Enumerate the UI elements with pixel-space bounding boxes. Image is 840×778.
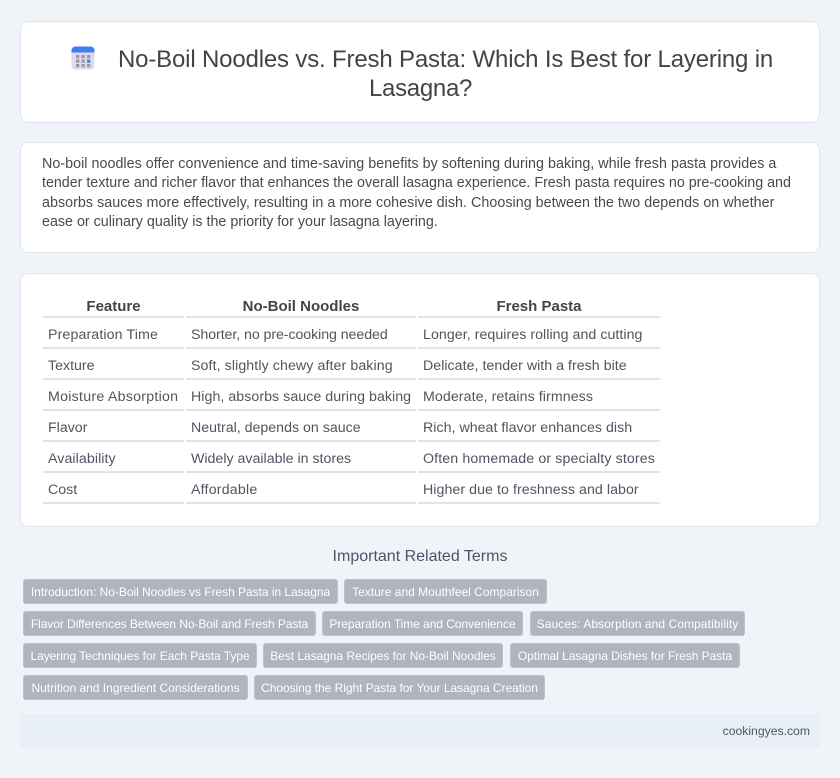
tags: related terms: Nutrition and Ingredient Considerations [31,681,240,695]
tags: related terms: Flavor Differences Between No-Boil and Fresh Pasta [31,617,308,631]
footer bar [20,714,820,748]
comparison table: Shorter, no pre-cooking needed [191,326,388,342]
comparison table: Longer, requires rolling and cutting [423,326,642,342]
comparison table: Neutral, depends on sauce [191,420,361,436]
tags: related terms: Layering Techniques for Each Pasta Type [30,649,250,663]
tags: related terms: Optimal Lasagna Dishes for Fresh Pasta [518,649,732,663]
comparison table: Often homemade or specialty stores [423,450,655,466]
tags: related terms: Preparation Time and Convenience [329,617,516,631]
comparison table: Texture [48,358,95,374]
tags: related terms [23,579,745,700]
text block: introduction: absorbs sauces more effectively, resulting in a more cohesive dish. Choosing between the two depends on whether [42,195,774,211]
text block: introduction: ease or culinary quality is the priority for your lasagna layering. [42,214,438,230]
footer source text: cookingyes.com [723,724,810,738]
comparison table: Higher due to freshness and labor [423,482,639,498]
panel: introduction [20,142,820,253]
comparison table: Affordable [191,482,257,498]
tags: related terms: Choosing the Right Pasta for Your Lasagna Creation [261,681,538,695]
text block: introduction: tender texture and richer flavor that enhances the overall lasagna experience. Fresh pasta requires no pre-cooking and [42,175,791,191]
comparison table: Rich, wheat flavor enhances dish [423,420,632,436]
panel: title card [20,21,820,123]
panel: comparison table [20,273,820,527]
comparison table: Feature [86,298,141,315]
title: Lasagna? [369,75,472,102]
comparison table: Flavor [48,420,87,436]
comparison table: Fresh Pasta [496,298,582,315]
comparison table: Availability [48,450,116,466]
tags: related terms: Best Lasagna Recipes for No-Boil Noodles [270,649,496,663]
comparison table: Moisture Absorption [48,388,178,404]
comparison table: Soft, slightly chewy after baking [191,358,393,374]
tags: related terms: Introduction: No-Boil Noodles vs Fresh Pasta in Lasagna [31,585,330,599]
title [118,46,773,102]
comparison table: Cost [48,482,77,498]
comparison table: Widely available in stores [191,450,351,466]
text block: introduction [42,156,791,230]
tags: related terms: Texture and Mouthfeel Comparison [352,585,539,599]
comparison table: Delicate, tender with a fresh bite [423,358,627,374]
comparison table: Moderate, retains firmness [423,388,593,404]
comparison table: Preparation Time [48,326,158,342]
tags: related terms: Sauces: Absorption and Compatibility [537,617,738,631]
title: No-Boil Noodles vs. Fresh Pasta: Which Is Best for Layering in [118,46,773,73]
comparison table: High, absorbs sauce during baking [191,388,411,404]
heading: related terms: Important Related Terms [333,548,507,565]
text block: introduction: No-boil noodles offer convenience and time-saving benefits by softening during baking, while fresh pasta provides a [42,156,776,172]
comparison table: No-Boil Noodles [243,298,359,315]
icon: calendar [72,46,94,70]
comparison table [43,298,660,504]
